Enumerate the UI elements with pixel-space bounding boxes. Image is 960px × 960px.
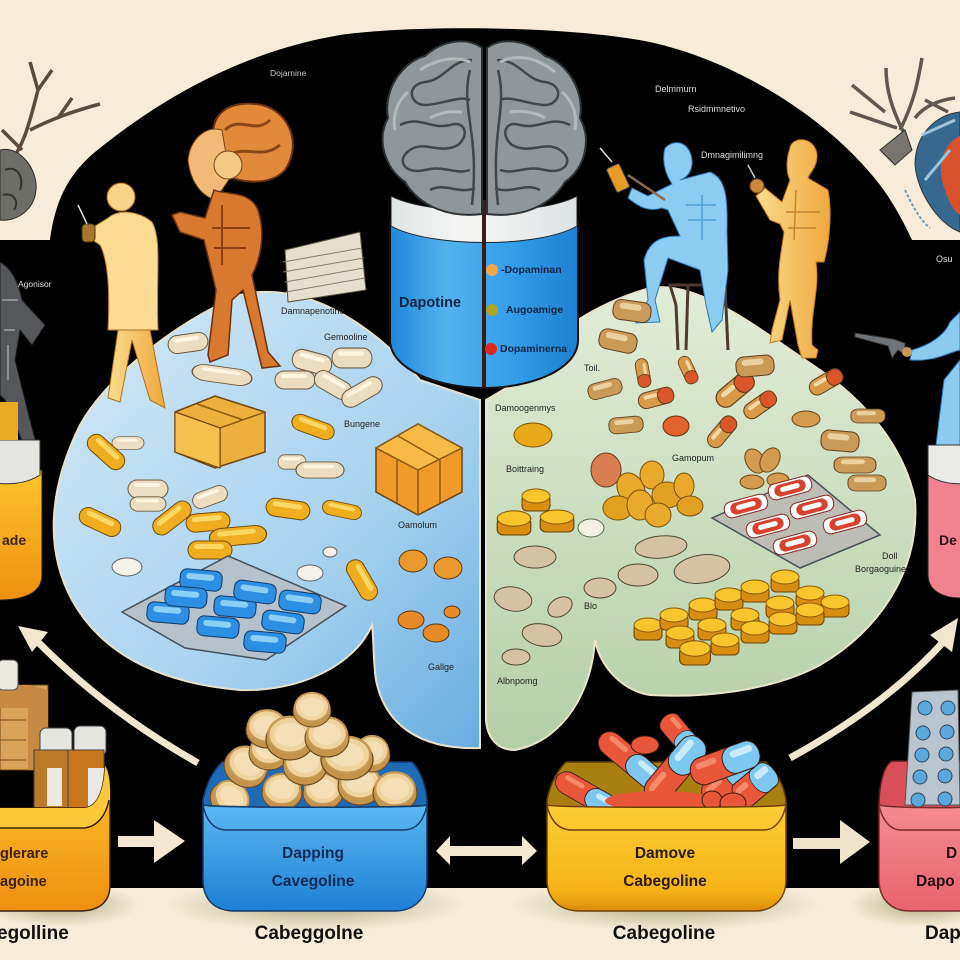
icon: left brain tree — [0, 62, 100, 220]
figure: right blue coat with injector — [855, 312, 960, 445]
blister pack blue — [122, 556, 346, 660]
label: Delmmurn — [655, 84, 697, 94]
tin: pink — [879, 690, 960, 911]
tablets: orange small — [398, 550, 462, 642]
tin label: glerare — [0, 846, 48, 862]
label: Dmnagimilimng — [701, 150, 763, 160]
label: Gamopum — [672, 453, 714, 463]
label: Borgaoguine — [855, 564, 906, 574]
arrow: yellow to pink — [793, 820, 870, 864]
ground shadows — [0, 879, 960, 931]
arrow: orange to blue — [118, 820, 185, 863]
figure: muscular brain head — [172, 104, 293, 368]
figure: lab coat person — [78, 183, 165, 408]
panel: blue lobe — [54, 292, 480, 748]
label: Doll — [882, 551, 898, 561]
jar: dopamine — [390, 196, 578, 388]
tin label: Damove — [635, 845, 696, 862]
label: Agonisor — [18, 279, 52, 289]
pills: gold pile centre — [497, 423, 703, 537]
icon: right heart tree — [850, 58, 960, 232]
icon: syringe blue figure — [600, 148, 665, 200]
jar label: Dapotine — [399, 295, 461, 311]
jar label: De — [939, 532, 957, 548]
tin label: D — [946, 845, 957, 862]
tin label: Cabegoline — [623, 873, 707, 890]
jar: left orange — [0, 402, 42, 600]
tin label: agoine — [0, 874, 47, 890]
tin: yellow — [547, 709, 786, 911]
jar label: ade — [2, 532, 26, 548]
label: Bungene — [344, 419, 380, 429]
jar: right pink — [928, 445, 960, 598]
label: Dojarnine — [270, 68, 307, 78]
label: Damnapenotine — [281, 306, 345, 316]
label: Rsidmmnetivo — [688, 104, 745, 114]
pills: blue lobe tablets — [112, 331, 386, 581]
tin label: Cavegoline — [272, 873, 355, 890]
caption: Cabegoline — [613, 923, 715, 944]
tablets: beige left of green lobe — [492, 534, 732, 665]
icon: tan flower pills — [740, 411, 820, 489]
label: Albnpomg — [497, 676, 538, 686]
tablets: gold stack right — [634, 570, 849, 665]
icon: orange boxes left — [175, 396, 265, 468]
jar legend: olive: Augoamige — [506, 304, 563, 316]
label: Damoogenmys — [495, 403, 556, 413]
caption: Cabeggolne — [255, 923, 363, 944]
icon: orange boxes right — [376, 424, 462, 515]
figure: left gray muscle man — [0, 262, 45, 450]
label: Blo — [584, 601, 597, 611]
jar legend: orange: -Dopaminan — [501, 264, 562, 276]
label: Osu — [936, 254, 953, 264]
blister pack red — [712, 475, 880, 568]
pills: yellow capsules — [76, 412, 381, 604]
label: Gemooline — [324, 332, 368, 342]
label: Boittraing — [506, 464, 544, 474]
figure: gold standing person — [748, 140, 830, 358]
tin: blue — [203, 693, 427, 911]
label: Oamolum — [398, 520, 437, 530]
label: Toil. — [584, 363, 600, 373]
panel: green lobe — [486, 287, 915, 750]
label: Gallge — [428, 662, 454, 672]
jar legend: red: Dopaminerna — [500, 343, 567, 355]
pills: green lobe capsules — [586, 298, 886, 491]
arrow: curved right — [790, 618, 958, 758]
caption: Dap — [925, 923, 960, 944]
tin label: Dapo — [916, 873, 955, 890]
arrow: double headed — [436, 836, 537, 865]
paper stack — [283, 232, 366, 302]
tin: orange left — [0, 660, 110, 911]
brain — [383, 41, 586, 215]
tin label: Dapping — [282, 845, 344, 862]
figure: blue seated person — [628, 143, 728, 350]
arrow: curved left — [18, 626, 198, 763]
